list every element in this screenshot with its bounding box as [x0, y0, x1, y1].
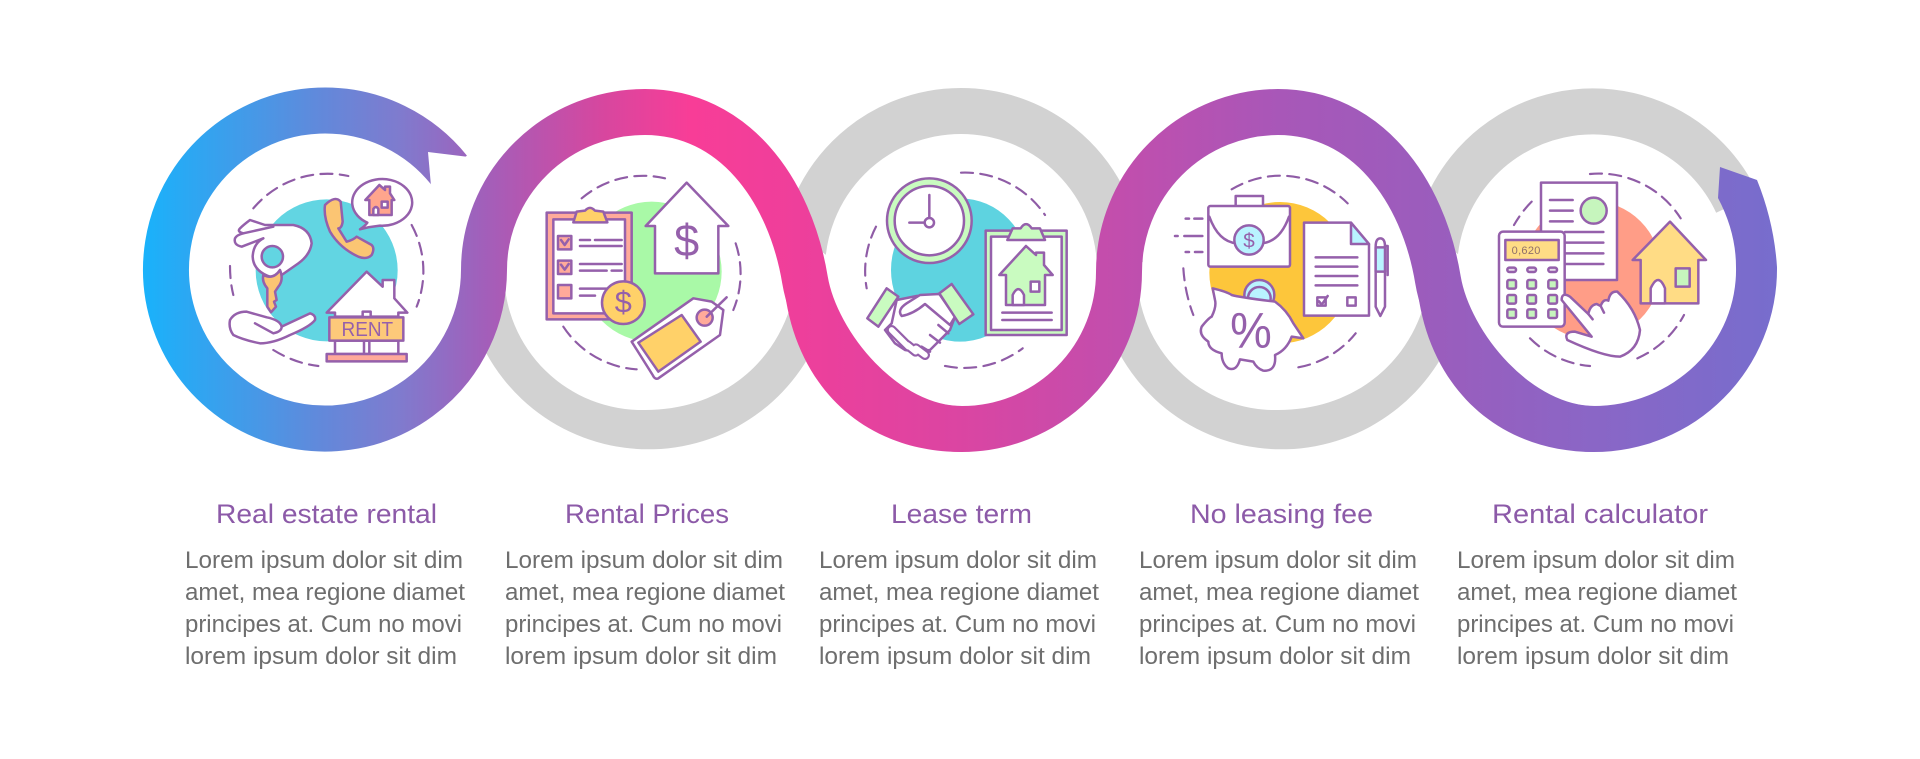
- text block: Lease term: [819, 499, 1099, 670]
- icon: checklist, house price and tag: [547, 176, 741, 379]
- text block: Rental Prices: Rental Prices: [565, 499, 729, 529]
- icon: calculator, document and house: [1499, 174, 1706, 366]
- text block: Rental Prices: lorem ipsum dolor sit dim: [505, 643, 777, 670]
- text block: Rental Prices: Lorem ipsum dolor sit dim: [505, 547, 783, 574]
- text block: Rental calculator: [1457, 499, 1737, 670]
- text block: Rental calculator: amet, mea regione diamet: [1457, 579, 1737, 606]
- infographic: [142, 88, 1777, 669]
- text block: Real estate rental: Real estate rental: [216, 499, 437, 529]
- icon: checklist, house price and tag: $: [674, 215, 699, 266]
- icon: briefcase, document and piggy bank: %: [1230, 302, 1272, 358]
- text block: Lease term: Lorem ipsum dolor sit dim: [819, 547, 1097, 574]
- text block: No leasing fee: No leasing fee: [1190, 499, 1373, 529]
- text block: No leasing fee: [1139, 499, 1419, 670]
- text block: Real estate rental: principes at. Cum no movi: [185, 611, 462, 638]
- text block: Lease term: lorem ipsum dolor sit dim: [819, 643, 1091, 670]
- text block: No leasing fee: amet, mea regione diamet: [1139, 579, 1419, 606]
- text block: Rental Prices: principes at. Cum no movi: [505, 611, 782, 638]
- text block: Rental calculator: lorem ipsum dolor sit dim: [1457, 643, 1729, 670]
- gray ring 4: [1100, 272, 1448, 449]
- icon: briefcase, document and piggy bank: [1175, 176, 1388, 371]
- text block: Real estate rental: lorem ipsum dolor sit dim: [185, 643, 457, 670]
- text block: Lease term: principes at. Cum no movi: [819, 611, 1096, 638]
- icon: checklist, house price and tag: $: [615, 286, 632, 320]
- gradient ribbon: [166, 111, 1777, 452]
- icon: key, phone and rent house: RENT: [341, 318, 394, 341]
- text block: Rental calculator: Rental calculator: [1492, 499, 1708, 529]
- text block: Rental Prices: amet, mea regione diamet: [505, 579, 785, 606]
- gray ring 3: [802, 111, 1120, 270]
- text block: No leasing fee: principes at. Cum no movi: [1139, 611, 1416, 638]
- icon: key, phone and rent house: [230, 174, 423, 366]
- icon: briefcase, document and piggy bank: $: [1243, 229, 1255, 252]
- text block: Lease term: amet, mea regione diamet: [819, 579, 1099, 606]
- text block: Real estate rental: Lorem ipsum dolor sit dim: [185, 547, 463, 574]
- icon: calculator, document and house: 0,620: [1512, 245, 1540, 257]
- text block: No leasing fee: Lorem ipsum dolor sit dim: [1139, 547, 1417, 574]
- gray ring 5: [1434, 111, 1737, 270]
- text block: Real estate rental: [185, 499, 465, 670]
- text block: Rental calculator: principes at. Cum no movi: [1457, 611, 1734, 638]
- text block: Lease term: Lease term: [891, 499, 1032, 529]
- text block: Rental Prices: [505, 499, 785, 670]
- icon: clock, handshake and lease: [865, 173, 1067, 368]
- text block: Rental calculator: Lorem ipsum dolor sit dim: [1457, 547, 1735, 574]
- gray ring 2: [467, 272, 815, 449]
- text block: No leasing fee: lorem ipsum dolor sit dim: [1139, 643, 1411, 670]
- text block: Real estate rental: amet, mea regione diamet: [185, 579, 465, 606]
